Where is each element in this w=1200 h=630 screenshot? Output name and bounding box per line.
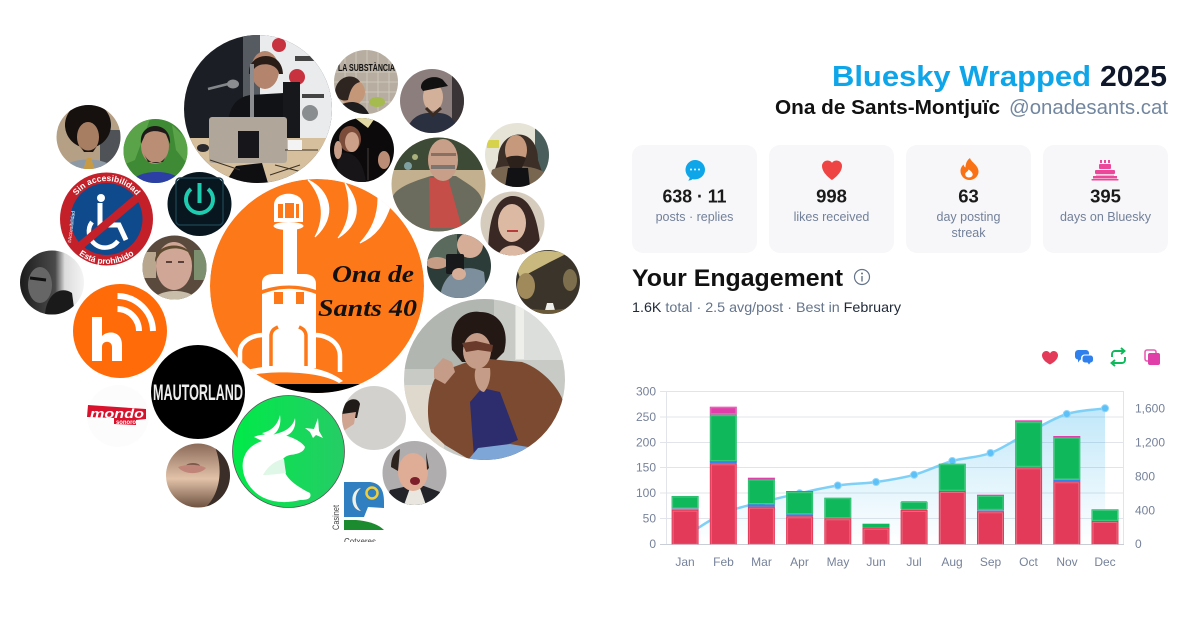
panel: day posting streak stat: streak <box>951 226 986 240</box>
avatar: accessibility prohibited badge: #Accesibilidad <box>67 211 77 243</box>
bar: Jul <box>901 501 928 544</box>
area: cumulative engagement fill <box>685 408 1105 544</box>
y axis: left scale: 250 <box>636 410 656 424</box>
y axis: right cumulative scale <box>1135 402 1165 551</box>
x axis: months: Jun <box>866 555 886 569</box>
x axis: months: Apr <box>790 555 809 569</box>
avatar: Mondo Sonoro logo: mondo <box>90 406 144 421</box>
x axis: months: Mar <box>751 555 772 569</box>
icon: info <box>854 270 870 284</box>
avatar: man with long hair and beard <box>485 123 549 187</box>
avatar: Ona de Sants 40 logo: Sants 40 <box>318 296 417 322</box>
x axis: months: Nov <box>1056 555 1078 569</box>
panel: likes received stat <box>769 145 894 253</box>
icon: chat bubble <box>686 160 705 180</box>
bar: Sep <box>977 495 1004 544</box>
y axis: right cumulative scale: 800 <box>1135 470 1155 484</box>
avatar: woman in leather jacket and sunglasses <box>404 299 565 462</box>
avatar: baby drinking <box>426 232 491 298</box>
logo: Casinet Cotxeres: Casinet <box>331 505 341 530</box>
bar: Nov <box>1053 436 1080 544</box>
subtitle: account name and handle: @onadesants.cat <box>1009 97 1168 119</box>
legend: engagement types <box>1042 348 1160 366</box>
x axis: months: May <box>827 555 849 569</box>
avatar: orange h podcast logo <box>73 284 167 378</box>
title: Bluesky Wrapped 2025: 2025 <box>1100 61 1167 93</box>
avatar: Mautorland logo <box>151 345 245 439</box>
y axis: right cumulative scale: 1,200 <box>1135 436 1165 450</box>
avatar: Mautorland logo: MAUTORLAND <box>153 380 243 405</box>
avatar: Mondo Sonoro logo: sonoro <box>116 420 136 426</box>
x axis: months: Aug <box>941 555 963 569</box>
avatar: man in front of bookshelf <box>142 235 207 300</box>
avatar: man with afro <box>56 102 121 170</box>
avatar: man in blue shirt among leaves <box>123 119 188 184</box>
icon: heart <box>822 160 842 180</box>
avatar: man in suit, mouth open <box>382 441 447 506</box>
y axis: left scale: 150 <box>636 460 656 474</box>
x axis: months: Feb <box>713 555 734 569</box>
panel: posts and replies stat: posts · replies <box>656 210 733 224</box>
panel: day posting streak stat: day posting <box>937 210 1001 224</box>
subtitle: account name and handle: Ona de Sants-Montjuïc <box>775 97 1000 119</box>
icon: replies <box>1075 350 1093 364</box>
line: cumulative engagement <box>685 405 1108 536</box>
icon: flame <box>960 158 979 180</box>
x axis: months: Jan <box>675 555 695 569</box>
logo: Casinet Cotxeres: Cotxeres <box>344 537 376 548</box>
panel: day posting streak stat <box>906 145 1031 253</box>
heading: Your Engagement: Your Engagement <box>632 265 843 292</box>
y axis: right cumulative scale: 0 <box>1135 537 1142 551</box>
y axis: left scale: 300 <box>636 384 656 398</box>
panel: avatar bubble cluster <box>20 35 580 542</box>
title: Bluesky Wrapped 2025: Bluesky Wrapped <box>832 61 1091 93</box>
bar: Feb <box>710 407 737 544</box>
panel: days on Bluesky stat <box>1043 145 1168 253</box>
panel: posts and replies stat <box>632 145 757 253</box>
x axis: months: Jul <box>906 555 922 569</box>
bar: Apr <box>786 491 813 544</box>
avatar: La Substància: LA SUBSTÀNCIA <box>338 61 395 74</box>
x axis: months: Sep <box>980 555 1001 569</box>
x axis: months <box>675 555 1116 569</box>
bar: Mar <box>748 478 775 544</box>
avatar: lips close-up <box>166 443 232 508</box>
y axis: left scale: 50 <box>643 512 656 526</box>
bar: May <box>824 498 851 544</box>
panel: day posting streak stat: 63 <box>958 186 979 206</box>
y axis: right cumulative scale: 400 <box>1135 504 1155 518</box>
avatar: Ona de Sants 40 logo <box>210 179 424 394</box>
y axis: right cumulative scale: 1,600 <box>1135 402 1165 416</box>
chart: monthly engagement stacked bars with cumulative line <box>636 384 1165 569</box>
avatar: Ona de Sants 40 logo: Ona de <box>332 262 414 288</box>
avatar: woman with brown hair <box>480 191 545 256</box>
avatar: man in black cap <box>400 69 464 133</box>
avatar: La Substància <box>334 50 398 114</box>
avatar: older man with mustache <box>391 137 486 232</box>
bar: Jan <box>672 496 699 544</box>
panel: days on Bluesky stat: days on Bluesky <box>1060 210 1152 224</box>
y axis: left scale: 0 <box>649 537 656 551</box>
y axis: left scale: 200 <box>636 436 656 450</box>
avatar: radio host at microphone <box>184 35 332 183</box>
avatar: mural <box>516 250 580 314</box>
avatar: accessibility prohibited badge: Sin accesibilidad <box>73 175 141 196</box>
avatar: Mondo Sonoro logo <box>87 385 149 447</box>
text: engagement summary: 1.6K total · 2.5 avg/post · Best in February <box>632 299 901 315</box>
x axis: months: Oct <box>1019 555 1038 569</box>
bar: Dec <box>1092 509 1118 544</box>
avatar: grey background profile <box>342 386 406 450</box>
subtitle: account name and handle <box>775 97 1168 119</box>
logo: Casinet Cotxeres <box>332 482 384 542</box>
bar: Aug <box>939 464 966 544</box>
avatar: green deer logo <box>232 396 344 508</box>
avatar: accessibility prohibited badge: Está prohibido <box>79 250 134 265</box>
avatar: woman speaking on dark stage <box>330 118 394 182</box>
y axis: left scale <box>636 384 656 551</box>
panel: posts and replies stat: 638 · 11 <box>662 186 726 206</box>
avatar: accessibility prohibited badge <box>60 172 153 266</box>
icon: likes <box>1042 351 1058 364</box>
icon: quotes <box>1145 350 1160 365</box>
panel: days on Bluesky stat: 395 <box>1090 186 1121 206</box>
avatar: teal power button <box>168 172 232 236</box>
y axis: left scale: 100 <box>636 486 656 500</box>
icon: reposts <box>1112 348 1125 366</box>
bar: Jun <box>862 524 890 544</box>
icon: birthday cake <box>1092 160 1118 180</box>
panel: likes received stat: 998 <box>816 186 847 206</box>
avatar: black and white portrait <box>20 250 84 315</box>
panel: likes received stat: likes received <box>794 210 869 224</box>
x axis: months: Dec <box>1094 555 1116 569</box>
bar: Oct <box>1015 420 1042 544</box>
